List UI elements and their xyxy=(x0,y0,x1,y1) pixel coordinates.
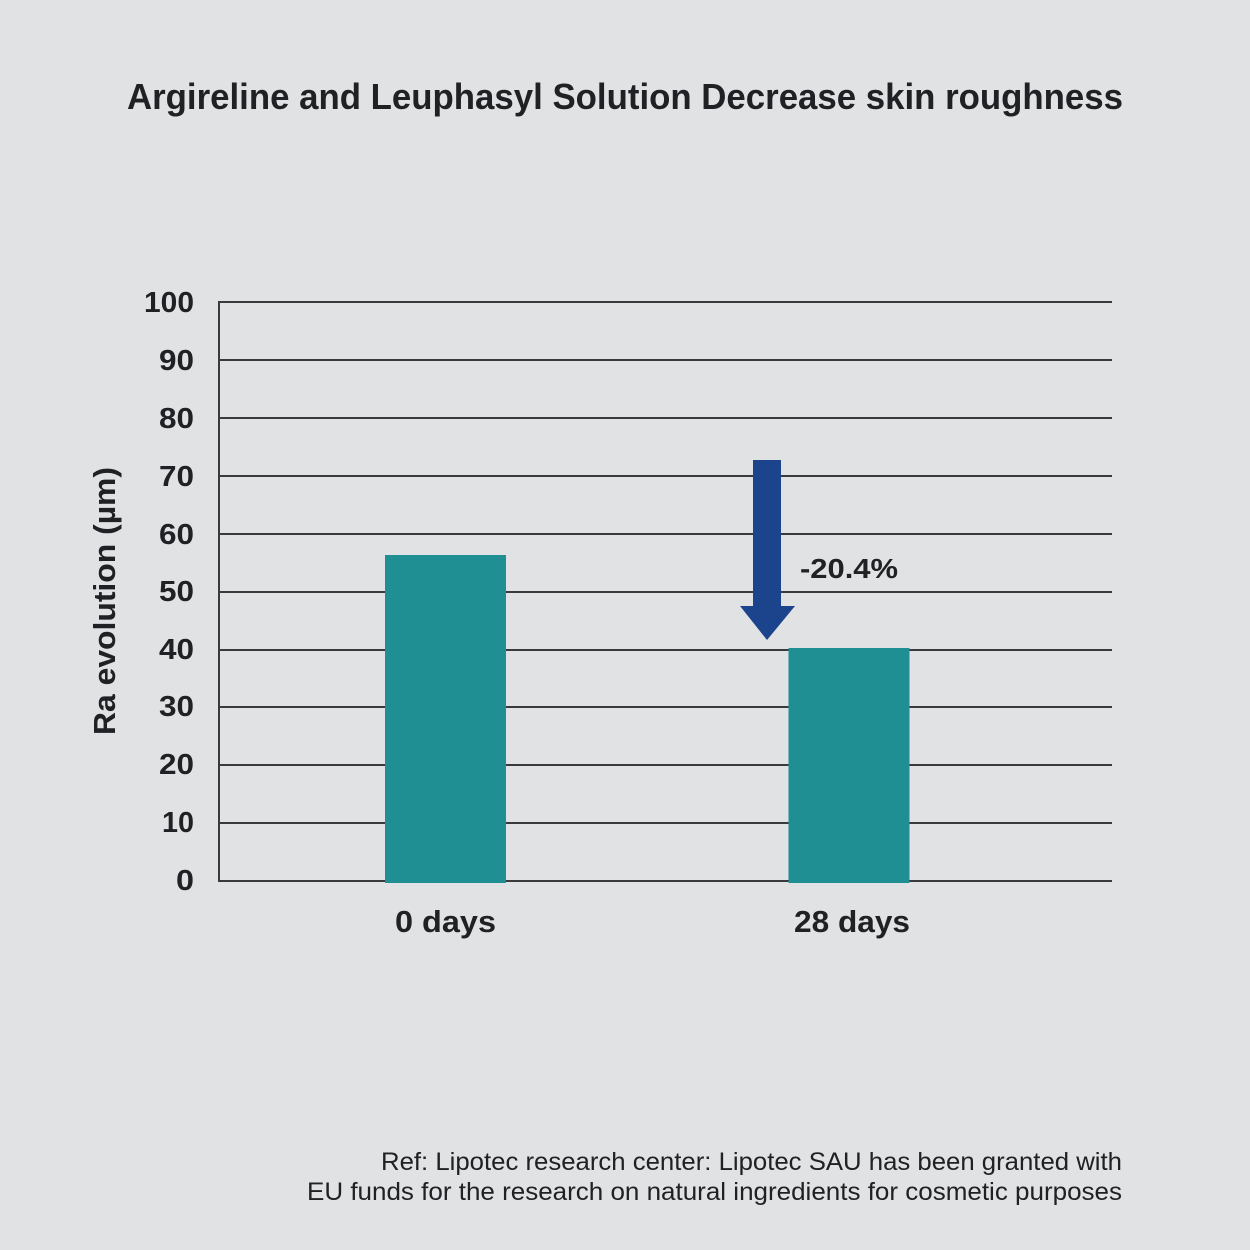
x label: 0 days: 0 days xyxy=(395,904,496,939)
reference text xyxy=(307,1148,1122,1206)
y-axis tick labels: 10 xyxy=(162,807,194,839)
y-axis tick labels: 50 xyxy=(159,576,194,608)
y-axis tick labels: 40 xyxy=(159,634,194,666)
y-axis tick labels: 0 xyxy=(176,865,194,897)
y-axis tick labels xyxy=(144,287,194,897)
bar: 28 days xyxy=(788,648,910,883)
y-axis tick labels: 90 xyxy=(159,345,194,377)
y-axis tick labels: 60 xyxy=(159,519,194,551)
y-axis tick labels: 100 xyxy=(144,287,194,319)
arrow: decrease xyxy=(740,460,795,640)
y-axis tick labels: 30 xyxy=(159,691,194,723)
callout: -20.4%: -20.4% xyxy=(800,553,898,584)
y-axis tick labels: 20 xyxy=(159,749,194,781)
reference text: EU funds for the research on natural ingredients for cosmetic purposes xyxy=(307,1178,1122,1206)
x label: 28 days: 28 days xyxy=(794,904,910,939)
y-axis title: Ra evolution (µm) xyxy=(87,467,122,735)
y-axis tick labels: 80 xyxy=(159,403,194,435)
bar: 0 days xyxy=(385,555,506,883)
title: Argireline and Leuphasyl Solution Decrease skin roughness xyxy=(127,76,1123,117)
bar chart xyxy=(87,287,1112,939)
reference text: Ref: Lipotec research center: Lipotec SAU has been granted with xyxy=(381,1148,1122,1176)
y-axis tick labels: 70 xyxy=(159,461,194,493)
